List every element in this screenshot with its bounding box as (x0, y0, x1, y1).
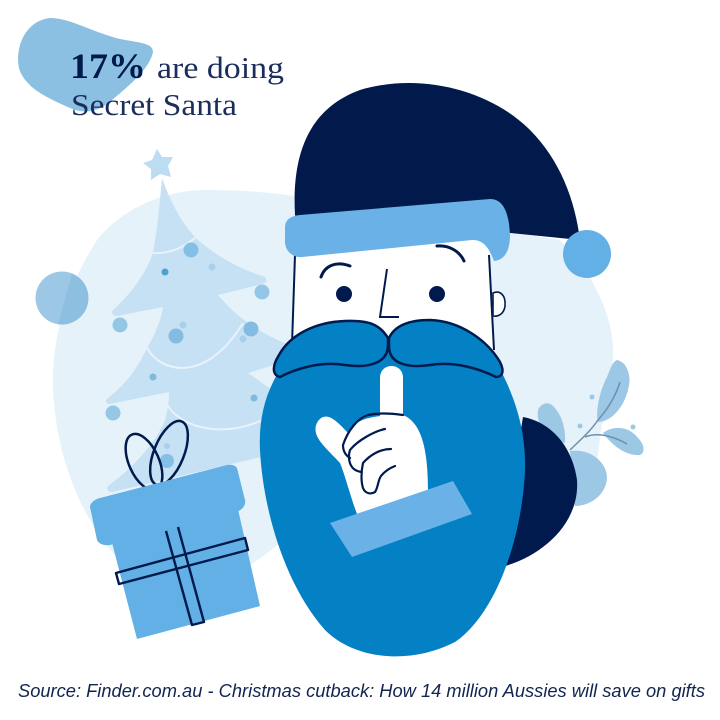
gift ribbon (116, 527, 248, 625)
eyebrows (321, 246, 464, 277)
icon: leaves (538, 360, 644, 506)
santa hat (295, 83, 580, 240)
heading: are doing (157, 50, 284, 85)
sleeve cuff (330, 481, 472, 557)
gift ribbon loops (118, 416, 196, 496)
ear (493, 292, 505, 316)
santa shoulder (498, 417, 577, 568)
icon: gift box (90, 416, 260, 639)
finger lines (343, 414, 403, 493)
eyes (336, 286, 352, 302)
beard (260, 340, 525, 656)
tree ornaments (106, 242, 270, 468)
icon: bauble left (36, 272, 88, 324)
nose (380, 269, 399, 317)
tree body (106, 178, 290, 492)
hat pompom (563, 230, 611, 278)
blob: heading accent (18, 18, 153, 111)
heading (70, 46, 284, 122)
moustache left (274, 321, 388, 377)
icon: christmas tree (106, 149, 290, 492)
gift lid (90, 465, 245, 545)
moustache right (389, 320, 503, 377)
hand (315, 366, 428, 514)
gift box body (110, 505, 260, 639)
heading: Secret Santa (71, 87, 237, 122)
source: Source: Finder.com.au - Christmas cutback: How 14 million Aussies will save on gifts (18, 681, 705, 701)
tree garlands (147, 237, 262, 429)
hat brim (285, 199, 510, 261)
heading: 17% (70, 46, 146, 86)
tree star (143, 149, 173, 180)
face (292, 225, 495, 350)
finger (380, 366, 403, 416)
background blob (53, 190, 613, 590)
moustache (274, 320, 503, 377)
palm and thumb (315, 415, 428, 514)
